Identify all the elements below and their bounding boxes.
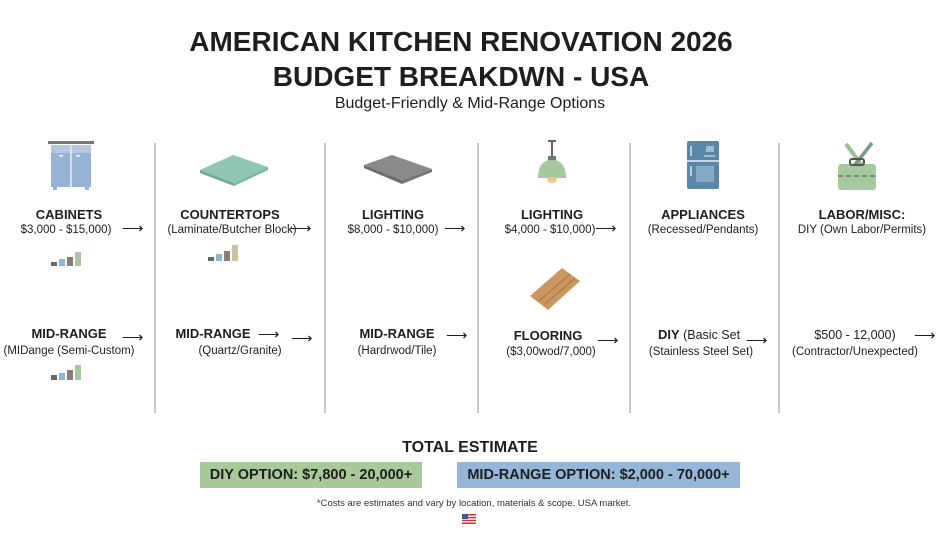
row 2 labels (4, 326, 918, 358)
title: AMERICAN KITCHEN RENOVATION 2026 (189, 26, 733, 57)
text: FLOORING (514, 328, 582, 343)
text: ⟶ (746, 332, 768, 349)
text: (Laminate/Butcher Block) (167, 224, 297, 236)
title (189, 26, 733, 92)
text: ⟶ (122, 220, 144, 237)
text: ⟶ (597, 332, 619, 349)
mini bar chart 2 (208, 245, 238, 261)
subtitle: Budget-Friendly & Mid-Range Options (335, 95, 605, 112)
text: LIGHTING (521, 207, 583, 222)
icon: fridge (687, 141, 719, 189)
text: APPLIANCES (661, 207, 745, 222)
title: BUDGET BREAKDWN - USA (273, 61, 649, 92)
icon: lighting slab (364, 155, 432, 184)
icon: countertop (200, 155, 268, 186)
mid-range option box: MID-RANGE OPTION: $2,000 - 70,000+ (467, 467, 730, 483)
icon: pendant lamp (538, 140, 566, 183)
text: DIY (Basic Set (658, 327, 740, 342)
text: ⟶ (122, 329, 144, 346)
text: MID-RANGE (359, 326, 435, 341)
mini bar chart 3 (51, 365, 81, 380)
text: (Recessed/Pendants) (648, 224, 758, 236)
text: ⟶ (258, 326, 280, 343)
text: (Quartz/Granite) (198, 345, 282, 357)
mini bar chart 1 (51, 252, 81, 266)
DIY option box: DIY OPTION: $7,800 - 20,000+ (210, 467, 412, 483)
text: $500 - 12,000) (814, 328, 896, 342)
text: MID-RANGE (31, 326, 107, 341)
text: ($3,00wod/7,000) (506, 346, 596, 358)
DIY option box (200, 462, 422, 488)
arrows (122, 220, 936, 349)
icon: toolbox (838, 142, 876, 190)
text: ⟶ (291, 330, 313, 347)
icon: cabinet (48, 141, 94, 190)
text: ⟶ (290, 220, 312, 237)
total estimate heading: TOTAL ESTIMATE (402, 439, 538, 456)
row 1 labels (20, 207, 926, 236)
text: ⟶ (444, 220, 466, 237)
icon: US flag (462, 514, 476, 524)
text: COUNTERTOPS (180, 207, 280, 222)
text: MID-RANGE (175, 326, 251, 341)
text: (Contractor/Unexpected) (792, 346, 918, 358)
text: (Hardrwod/Tile) (358, 345, 436, 357)
text: LABOR/MISC: (819, 207, 905, 222)
footnote: *Costs are estimates and vary by location, materials & scope. USA market. (317, 498, 631, 509)
text: CABINETS (36, 207, 102, 222)
text: DIY (Own Labor/Permits) (798, 224, 926, 236)
text: ⟶ (914, 327, 936, 344)
icon: floor plank (530, 268, 580, 310)
text: (Stainless Steel Set) (649, 346, 753, 358)
text: ⟶ (595, 220, 617, 237)
text: LIGHTING (362, 207, 424, 222)
text: $8,000 - $10,000) (348, 224, 438, 236)
text: (MIDange (Semi-Custom) (4, 345, 134, 357)
text: $4,000 - $10,000) (505, 224, 595, 236)
text: $3,000 - $15,000) (21, 224, 111, 236)
mid-range option box (457, 462, 740, 488)
text: ⟶ (446, 327, 468, 344)
